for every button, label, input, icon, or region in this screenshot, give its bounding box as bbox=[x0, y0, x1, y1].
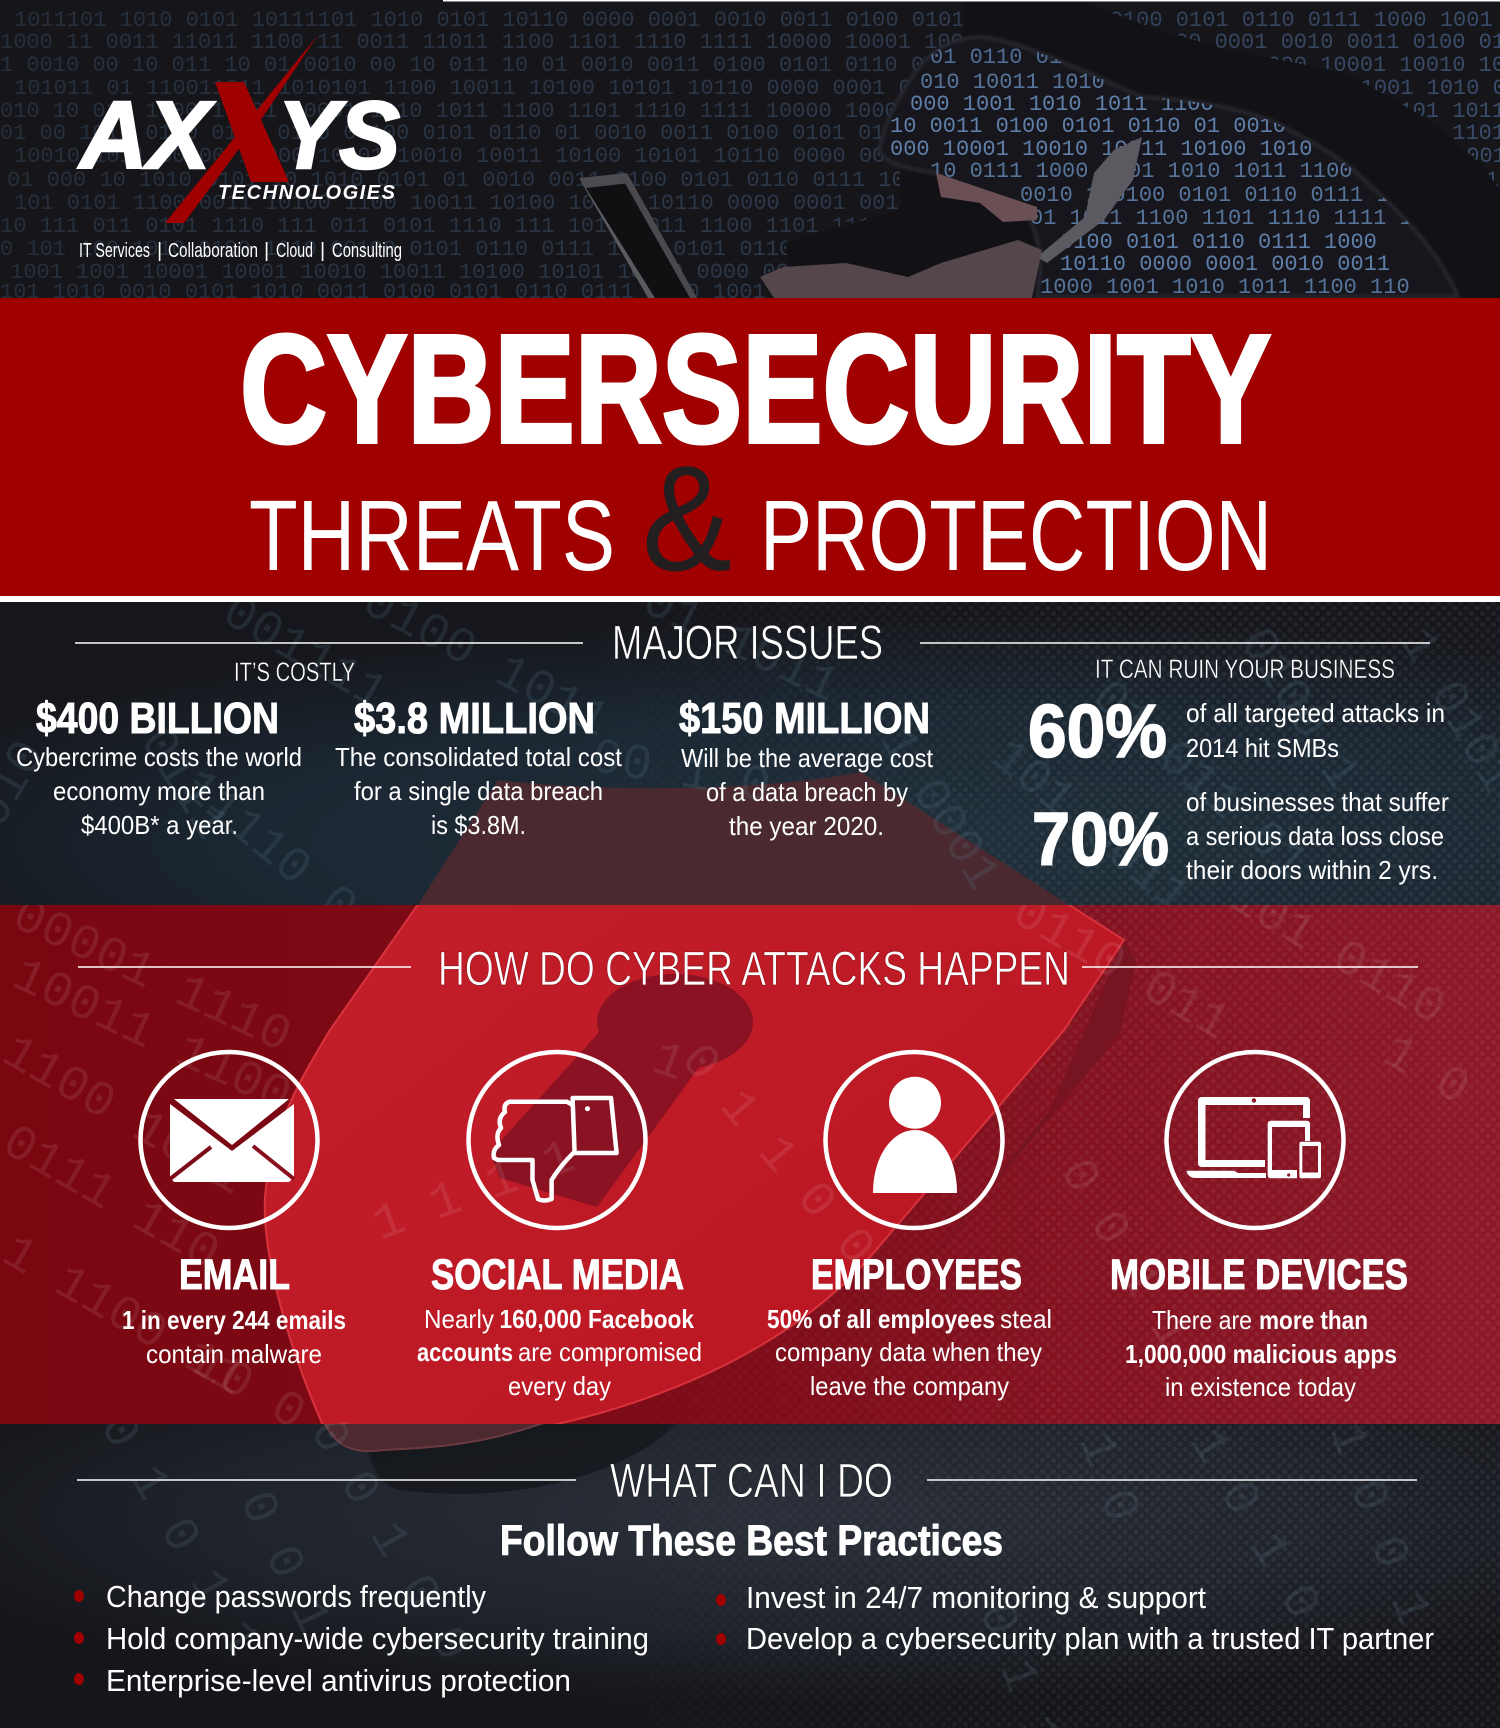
stat: 60%: 2014 hit SMBs bbox=[1186, 733, 1339, 763]
logo tagline: | bbox=[264, 240, 269, 262]
background: padlock and binary digits: 0 1 0 1 1 bbox=[86, 1404, 271, 1667]
column: social media: are compromised bbox=[518, 1337, 702, 1367]
collar bbox=[1037, 137, 1142, 263]
background: padlock and binary digits: 10011 1100 bbox=[3, 948, 299, 1126]
background: padlock and binary digits bbox=[0, 573, 1500, 1728]
stat: 70%: 70% bbox=[1032, 797, 1169, 881]
heading: how do cyber attacks happen: HOW DO CYBER ATTACKS HAPPEN bbox=[438, 943, 1070, 996]
stat: 70%: of businesses that suffer bbox=[1186, 787, 1449, 817]
logo tagline bbox=[80, 242, 402, 261]
hacker silhouette: 10110 0000 0001 0010 0011 bbox=[1060, 252, 1390, 277]
background: padlock and binary digits: 1 0 bbox=[1372, 1024, 1478, 1119]
stat: $400 billion bbox=[16, 694, 302, 840]
face bbox=[936, 173, 1037, 222]
subheading: follow these best practices: Follow These Best Practices bbox=[500, 1517, 1003, 1565]
background: padlock and binary digits: 10 0 0 bbox=[182, 1334, 366, 1474]
column: employees: steal bbox=[1000, 1304, 1052, 1334]
column: email: 1 in every 244 emails bbox=[122, 1305, 346, 1335]
stat: $400 billion: Cybercrime costs the world bbox=[16, 742, 302, 772]
background: padlock and binary digits: 0 0 1 bbox=[225, 1483, 341, 1643]
background: padlock and binary digits: 11110 00 bbox=[170, 759, 390, 957]
hacker silhouette: 000 10001 10010 10011 10100 1010 bbox=[890, 137, 1312, 162]
stat: $3.8 million bbox=[335, 694, 623, 840]
background: padlock and binary digits: 00001 1110 bbox=[3, 888, 299, 1066]
background: padlock and binary digits: 0111 bbox=[126, 718, 238, 850]
stat: $150 million: $150 MILLION bbox=[679, 694, 930, 743]
stat: $150 million: the year 2020. bbox=[729, 811, 884, 841]
column: social media: Nearly bbox=[424, 1304, 494, 1334]
column: email: contain malware bbox=[146, 1339, 322, 1369]
background binary code rows: 1001 1001 10001 10001 10010 10011 10100 10101 10110 0000 0001 0010 0011 0100 10110 0000 0001 0010 0011 0100 0101 bbox=[10, 260, 1489, 285]
column: email bbox=[122, 1251, 346, 1369]
list: left best practices bbox=[74, 1579, 649, 1698]
hacker silhouette: 10 0011 0100 0101 0110 01 0010 bbox=[890, 114, 1286, 139]
column: mobile devices bbox=[1110, 1251, 1408, 1402]
background: padlock and binary digits: 1 1 1 1 bbox=[366, 1130, 583, 1255]
logo: AXXYS Technologies bbox=[78, 35, 400, 223]
hacker silhouette: 0010 1 0100 0101 0110 0111 1000 bbox=[1020, 183, 1429, 208]
background: padlock and binary digits: 1101 0110 bbox=[1192, 854, 1454, 1039]
hands bbox=[760, 240, 1042, 298]
list: right best practices bbox=[716, 1580, 1434, 1656]
background: padlock and binary digits: 001111 bbox=[212, 584, 396, 724]
logo: AXXYS Technologies: YS bbox=[278, 82, 400, 189]
icon: employee person bbox=[826, 1052, 1002, 1228]
hacker silhouette: 1000 1001 1010 1011 1100 110 bbox=[1040, 275, 1410, 300]
background: padlock and binary digits: 00 1 0 bbox=[587, 730, 774, 817]
column: mobile devices: 1,000,000 malicious apps bbox=[1125, 1339, 1397, 1369]
list: right best practices: Develop a cybersecurity plan with a trusted IT partner bbox=[746, 1621, 1434, 1656]
list: left best practices: Change passwords frequently bbox=[106, 1579, 486, 1614]
hacker silhouette: 010 10011 1010 bbox=[920, 70, 1105, 95]
hacker silhouette: 000 1001 1010 1011 1100 bbox=[910, 92, 1214, 117]
background: padlock and binary digits: 01 1011 bbox=[633, 573, 847, 716]
column: mobile devices: more than bbox=[1259, 1305, 1368, 1335]
laptop bbox=[579, 173, 697, 298]
background: padlock and binary digits: 0110 011 bbox=[1002, 884, 1238, 1054]
background binary code rows: 101 1010 0010 0101 1010 0011 0100 0101 0110 0111 1000 1001 1010 1011 1100 1101 1110 1111 1011 1100 1101 bbox=[0, 280, 1360, 305]
logo tagline: Cloud bbox=[276, 240, 313, 262]
background: padlock and binary digits: 1 0001 1 bbox=[866, 718, 1042, 952]
subheading: it can ruin your business: IT CAN RUIN YOUR BUSINESS bbox=[1095, 654, 1395, 684]
panel: how do cyber attacks happen bbox=[0, 905, 1500, 1424]
background: padlock and binary digits: 0100 1011 bbox=[352, 574, 618, 751]
panel: hero header with hooded hacker bbox=[0, 0, 1500, 305]
icon: mobile devices bbox=[1166, 1052, 1344, 1228]
ampersand: & bbox=[642, 434, 732, 602]
background: padlock and binary digits: 01 011 01 bbox=[1079, 670, 1318, 893]
stat: $3.8 million: $3.8 MILLION bbox=[354, 694, 595, 743]
background: padlock and binary digits: 1 bbox=[645, 1031, 692, 1095]
icon: email envelope bbox=[140, 1052, 318, 1228]
stat: 70% bbox=[1032, 787, 1449, 885]
column: social media bbox=[417, 1251, 702, 1401]
heading: major issues: MAJOR ISSUES bbox=[612, 617, 883, 670]
background: padlock and binary digits: 0 0 1 0 0 bbox=[296, 1410, 481, 1672]
subtitle: threats: THREATS bbox=[249, 480, 615, 592]
background binary code rows: 01 000 10 1010 0101 10 1010 0101 01 0010 0011 0100 0101 0110 0111 1000 1001 1010 1011 1100 1101 1110 1111 1011 0110 bbox=[7, 168, 1500, 193]
hacker silhouette: 01 1011 1100 1101 1110 1111 1011 bbox=[1030, 206, 1452, 231]
column: email: EMAIL bbox=[179, 1251, 290, 1299]
background binary code rows: 101 0101 1100 0011 10100 1100 10011 10100 10101 10110 0000 0001 0010 0011 0100 0101 0110 0111 1000 1001 1010 1011 bbox=[14, 191, 1500, 216]
hacker silhouette bbox=[760, 0, 1500, 300]
column: employees bbox=[767, 1251, 1052, 1401]
column: mobile devices: MOBILE DEVICES bbox=[1110, 1251, 1408, 1299]
logo tagline: Collaboration bbox=[168, 240, 258, 262]
background: padlock and binary digits: 0 0 1 1 bbox=[1046, 1150, 1201, 1360]
stat: 60%: 60% bbox=[1028, 689, 1167, 773]
background: padlock and binary digits: 0100 1 bbox=[1226, 618, 1370, 801]
stat: 70%: a serious data loss close bbox=[1186, 821, 1444, 851]
logo tagline: Consulting bbox=[332, 240, 402, 262]
list: left best practices: Hold company-wide cybersecurity training bbox=[106, 1621, 649, 1656]
background: padlock and binary digits: 101 0011 bbox=[980, 729, 1200, 927]
stat: $150 million bbox=[679, 694, 934, 841]
column: employees: EMPLOYEES bbox=[811, 1251, 1022, 1299]
logo tagline: | bbox=[157, 240, 162, 262]
list: right best practices: Invest in 24/7 monitoring & support bbox=[746, 1580, 1206, 1615]
stat: $150 million: of a data breach by bbox=[706, 777, 908, 807]
column: employees: 50% of all employees bbox=[767, 1304, 995, 1334]
stat: $400 billion: $400 BILLION bbox=[36, 694, 279, 743]
background: padlock and binary digits: 1 0 0 1 bbox=[1315, 1416, 1440, 1633]
top white strip bbox=[443, 0, 1500, 2]
subheading: it's costly: IT’S COSTLY bbox=[234, 657, 355, 687]
stat: $3.8 million: The consolidated total cost bbox=[335, 742, 623, 772]
stat: $150 million: Will be the average cost bbox=[681, 743, 934, 773]
stat: 60% bbox=[1028, 689, 1445, 773]
column: social media: every day bbox=[508, 1371, 611, 1401]
panel: what can I do bbox=[0, 1424, 1500, 1728]
column: social media: accounts bbox=[417, 1337, 513, 1367]
column: employees: company data when they bbox=[775, 1337, 1042, 1367]
column: mobile devices: in existence today bbox=[1165, 1372, 1356, 1402]
background binary code rows: 10 111 011 0101 1110 111 011 0101 1110 111 1010 1011 1100 1101 1110 1111 10000 10001 10010 10011 10100 1100 1101 bbox=[0, 214, 1479, 239]
logo tagline: IT Services bbox=[79, 240, 150, 262]
background: padlock and binary digits: 1 0 1 0 bbox=[1176, 1420, 1331, 1630]
stat: $3.8 million: is $3.8M. bbox=[431, 810, 526, 840]
icon: thumbs down bbox=[468, 1052, 646, 1228]
hacker silhouette: 0100 0101 0110 0111 1000 bbox=[1060, 230, 1377, 255]
panel: title banner bbox=[0, 298, 1500, 602]
logo tagline: | bbox=[320, 240, 325, 262]
list: left best practices: Enterprise-level antivirus protection bbox=[106, 1663, 571, 1698]
background: padlock and binary digits: 1 0 bbox=[1065, 1426, 1149, 1530]
heading: what can I do: WHAT CAN I DO bbox=[610, 1455, 893, 1508]
stat: 60%: of all targeted attacks in bbox=[1186, 698, 1445, 728]
hacker silhouette: 10 0111 1000 1001 1010 1011 1100 bbox=[930, 159, 1352, 184]
column: social media: SOCIAL MEDIA bbox=[431, 1251, 684, 1299]
stat: $400 billion: $400B* a year. bbox=[81, 810, 238, 840]
background: padlock and binary digits: 0 1 1 0 0 bbox=[668, 1034, 885, 1277]
logo: AXXYS Technologies: TECHNOLOGIES bbox=[218, 182, 396, 204]
logo: AXXYS Technologies: AX bbox=[78, 82, 215, 189]
stat: $3.8 million: for a single data breach bbox=[354, 776, 603, 806]
panel: major issues bbox=[0, 602, 1500, 905]
background binary code rows: 0 101 100 1010 0100 1010 00100 0101 0110 0111 1000 0101 0110 0111 1000 1001 1010 1011 1100 1101 1110 1111 0101 bbox=[0, 237, 1452, 262]
hacker silhouette: 01 0110 01 bbox=[930, 45, 1062, 70]
background binary code rows bbox=[0, 8, 1500, 305]
column: mobile devices: There are bbox=[1152, 1305, 1252, 1335]
column: social media: 160,000 Facebook bbox=[500, 1304, 694, 1334]
stat: 70%: their doors within 2 yrs. bbox=[1186, 855, 1438, 885]
column: employees: leave the company bbox=[810, 1371, 1009, 1401]
subtitle: protection: PROTECTION bbox=[760, 480, 1272, 592]
stat: $400 billion: economy more than bbox=[53, 776, 265, 806]
